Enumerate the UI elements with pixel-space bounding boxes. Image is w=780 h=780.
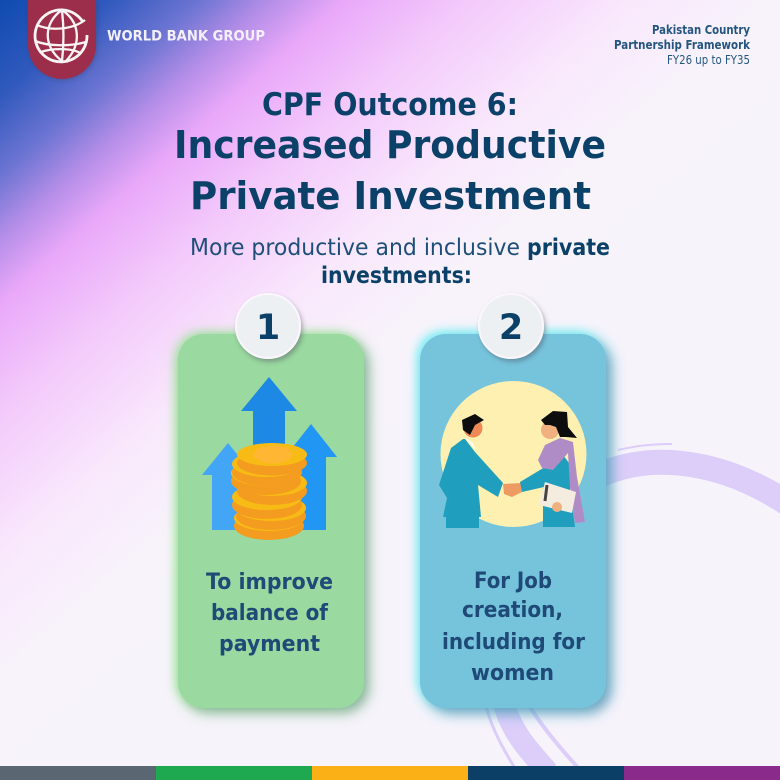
number badge 2: 2: [499, 308, 523, 348]
subtitle: investments:: [321, 261, 472, 289]
brand name: WORLD BANK GROUP: [107, 28, 265, 44]
card text: payment: [219, 632, 320, 657]
title: Private Investment: [190, 174, 591, 218]
footer colour bar: [0, 766, 780, 780]
subtitle: private: [527, 233, 610, 261]
icon: globe: [35, 10, 87, 62]
title: [174, 87, 606, 218]
title: Increased Productive: [174, 123, 606, 167]
handshake: [503, 483, 522, 497]
number badge 1: 1: [256, 308, 280, 348]
framework label: Partnership Framework: [614, 38, 751, 52]
number badge 2: [479, 294, 543, 358]
card text: creation,: [462, 598, 563, 623]
panel: job creation: [420, 334, 606, 708]
framework label: [614, 23, 751, 67]
decorative brush ring: [486, 444, 780, 772]
framework label: Pakistan Country: [652, 23, 750, 37]
number badge 1: [236, 294, 300, 358]
card text: women: [471, 661, 554, 686]
card text: For Job: [474, 569, 552, 594]
card text: [206, 570, 333, 657]
subtitle: [190, 233, 610, 289]
subtitle: More productive and inclusive: [190, 233, 520, 261]
icon: handshake illustration: [439, 381, 586, 528]
card text: including for: [442, 630, 585, 655]
framework label: FY26 up to FY35: [667, 53, 750, 67]
title: CPF Outcome 6:: [262, 87, 518, 123]
man: [439, 414, 503, 528]
card text: [442, 569, 585, 686]
logo badge: [28, 0, 96, 79]
card text: To improve: [206, 570, 333, 595]
card text: balance of: [211, 601, 328, 626]
woman: [520, 411, 585, 527]
panel: balance of payment: [178, 334, 364, 708]
icon: arrows and coins: [202, 377, 337, 540]
